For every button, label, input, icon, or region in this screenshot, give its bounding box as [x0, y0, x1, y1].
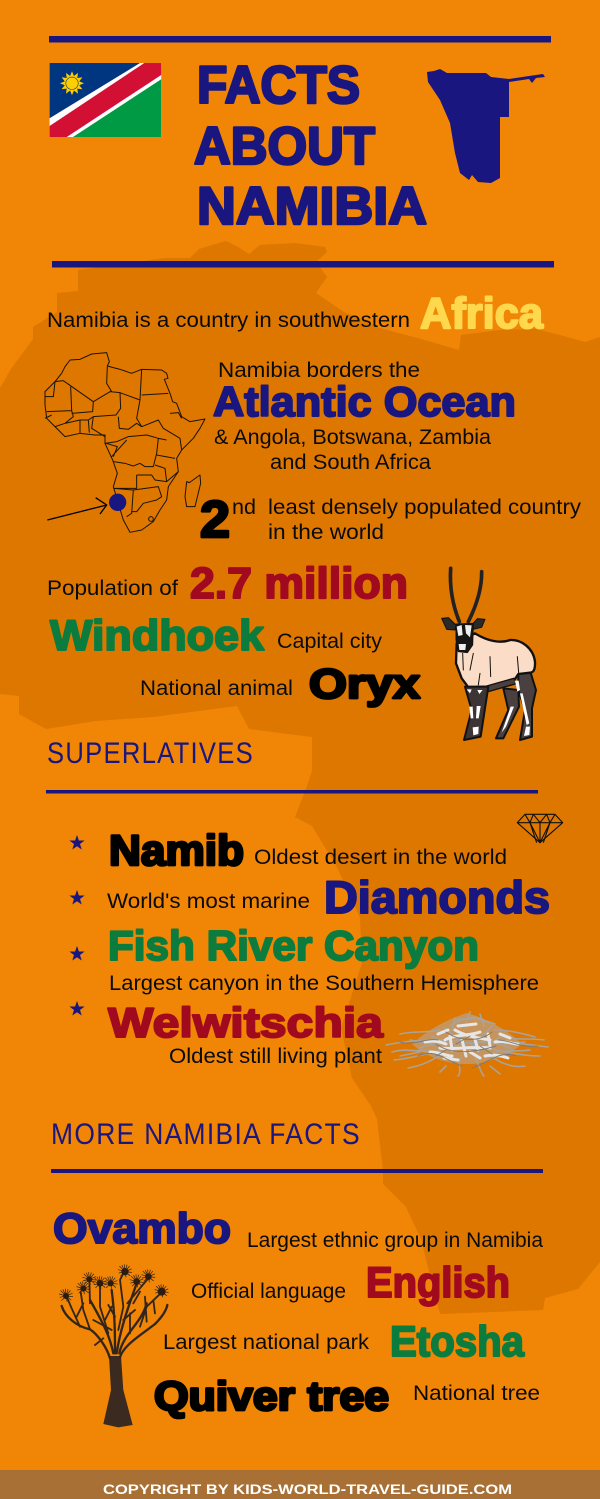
item: Fish River Canyon: Fish River Canyon: [108, 922, 479, 969]
fact: Etosha: [163, 1318, 525, 1366]
flag of Namibia: [50, 63, 161, 137]
fact: Quiver tree: [154, 1373, 540, 1419]
fact: English: English: [366, 1259, 510, 1307]
text block: capital: [50, 612, 383, 660]
fact: Ovambo: [53, 1205, 543, 1253]
footer band: COPYRIGHT BY KIDS-WORLD-TRAVEL-GUIDE.COM: [103, 1482, 512, 1497]
text block: national animal: [140, 660, 421, 707]
fact: Quiver tree: Quiver tree: [154, 1373, 389, 1419]
item: Namib: [109, 827, 507, 875]
item: Fish River Canyon: Largest canyon in the Southern Hemisphere: [109, 972, 539, 995]
fact: Etosha: Largest national park: [163, 1331, 370, 1354]
text block: density fact: in the world: [268, 521, 384, 544]
text block: capital: Capital city: [277, 630, 383, 653]
background: Africa silhouette: [0, 241, 600, 1314]
text block: density fact: least densely populated country: [268, 496, 582, 519]
more facts rule: [51, 1169, 543, 1173]
second rule: [52, 261, 554, 268]
title: [194, 56, 427, 236]
fact: Quiver tree: National tree: [413, 1382, 540, 1405]
top rule: [49, 36, 551, 42]
item: Diamonds: [107, 872, 550, 923]
item: Fish River Canyon: [108, 922, 539, 995]
fact: Etosha: Etosha: [390, 1318, 525, 1366]
text block: population: Population of: [47, 577, 178, 600]
fact: Ovambo: Largest ethnic group in Namibia: [247, 1229, 543, 1252]
icon: quiver tree: [59, 1265, 168, 1427]
item: Welwitschia: Oldest still living plant: [169, 1045, 382, 1068]
fact: Ovambo: Ovambo: [53, 1205, 231, 1253]
intro line: [47, 289, 544, 338]
text block: capital: Windhoek: [50, 612, 264, 660]
item: Namib: Namib: [109, 827, 244, 875]
title: FACTS: [197, 56, 360, 115]
superlatives rule: [46, 790, 538, 794]
list: superlatives: [69, 827, 550, 1068]
icon: welwitschia plant: [386, 1012, 548, 1076]
text block: borders: Atlantic Ocean: [213, 378, 516, 425]
text block: national animal: Oryx: [309, 660, 421, 707]
text block: population: 2.7 million: [190, 559, 408, 608]
text block: borders: and South Africa: [270, 451, 431, 474]
icon: Africa outline map with Namibia marker: [45, 353, 205, 532]
intro line: Namibia is a country in southwestern: [47, 309, 410, 332]
icon: oryx: [442, 568, 536, 740]
star bullets: [69, 835, 85, 1016]
text block: density fact: 2: [200, 491, 230, 549]
heading: superlatives: SUPERLATIVES: [47, 737, 254, 770]
text block: density fact: nd: [232, 496, 256, 519]
item: Welwitschia: [108, 999, 384, 1068]
text block: borders: & Angola, Botswana, Zambia: [214, 426, 491, 449]
text block: borders: Namibia borders the: [218, 359, 420, 382]
text block: borders: [213, 359, 516, 474]
intro line: Africa: [420, 289, 544, 338]
fact: English: [191, 1259, 510, 1307]
item: Diamonds: World's most marine: [107, 890, 310, 913]
item: Diamonds: Diamonds: [324, 872, 550, 923]
text block: density fact: [200, 491, 582, 549]
item: Welwitschia: Welwitschia: [108, 999, 384, 1046]
footer band: [0, 1470, 600, 1499]
item: Namib: Oldest desert in the world: [254, 846, 507, 869]
icon: Namibia silhouette map: [427, 69, 545, 183]
heading: more Namibia facts: MORE NAMIBIA FACTS: [51, 1118, 361, 1151]
icon: diamond: [517, 814, 563, 843]
fact: English: Official language: [191, 1280, 346, 1303]
text block: population: [47, 559, 408, 608]
text block: national animal: National animal: [140, 677, 293, 700]
title: ABOUT: [194, 117, 375, 176]
title: NAMIBIA: [197, 177, 427, 236]
